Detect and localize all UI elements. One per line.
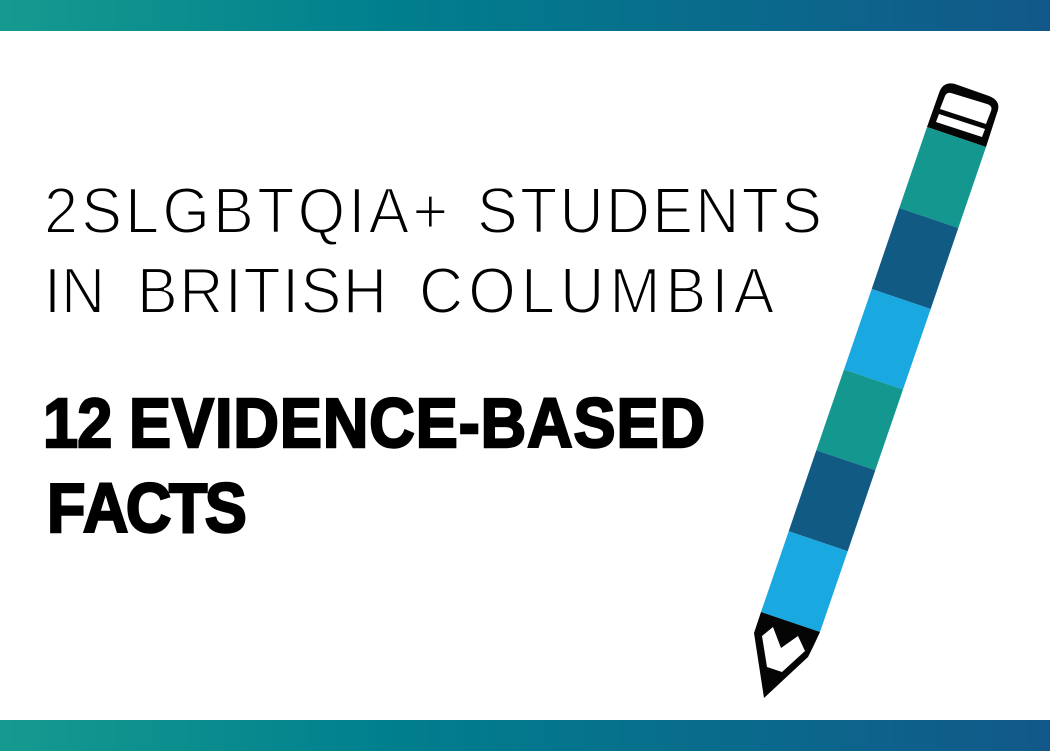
pencil tip: [754, 612, 820, 698]
heading: 12 evidence-based facts: FACTS: [47, 470, 247, 548]
bottom gradient bar: [0, 720, 1050, 751]
title: subject: IN: [44, 255, 105, 327]
heading: 12 evidence-based facts: EVIDENCE-BASED: [129, 385, 705, 463]
top gradient bar: [0, 0, 1050, 31]
title: subject: 2SLGBTQIA+: [44, 175, 448, 247]
title: subject: [44, 175, 822, 327]
title: subject: BRITISH: [137, 255, 387, 327]
heading: 12 evidence-based facts: [43, 385, 705, 548]
pencil eraser: [927, 83, 998, 147]
title: subject: STUDENTS: [477, 175, 822, 247]
heading: 12 evidence-based facts: 12: [43, 385, 112, 463]
title: subject: COLUMBIA: [419, 255, 774, 327]
icon: pencil: [754, 83, 998, 698]
pencil body stripes: [761, 127, 986, 632]
